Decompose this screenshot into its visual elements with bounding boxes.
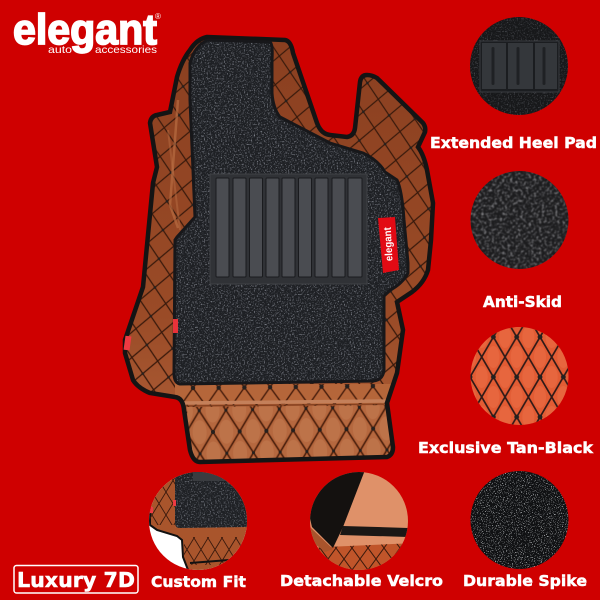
- mat tan leather base: [120, 30, 440, 470]
- mat black piping: [125, 37, 433, 462]
- carpet binding: [174, 40, 408, 384]
- feature: durable spike: [463, 465, 587, 590]
- logo wordmark: elegant: [13, 6, 157, 54]
- feature: anti-skid: [470, 171, 568, 308]
- small tag on mat side: [124, 336, 131, 350]
- feature: exclusive tan-black: [418, 322, 594, 457]
- heel pad detail circle: [470, 17, 568, 115]
- feature: detachable velcro: [280, 467, 443, 590]
- heel pad label: Extended Heel Pad: [430, 134, 597, 152]
- quilted leather detail circle: [470, 327, 568, 425]
- spike detail circle: [470, 471, 568, 569]
- tan seam along carpet edge: [272, 93, 399, 183]
- custom fit detail circle: [149, 472, 247, 570]
- velcro detail circle: [310, 472, 408, 570]
- small tag on carpet edge: [173, 319, 178, 333]
- red brand tag on carpet: [378, 217, 399, 273]
- feature: custom fit: [149, 472, 247, 588]
- feature: extended heel pad: [430, 12, 597, 152]
- registered mark: ®: [155, 12, 161, 21]
- badge outline: [14, 566, 138, 593]
- velcro label: Detachable Velcro: [280, 572, 443, 590]
- floor mat: [120, 30, 440, 470]
- red brand tag on carpet: elegant: [382, 226, 395, 261]
- durable spike label: Durable Spike: [463, 572, 587, 590]
- logo tagline right: accessories: [95, 44, 157, 56]
- custom fit label: Custom Fit: [151, 573, 247, 591]
- tan-black label: Exclusive Tan-Black: [418, 439, 594, 457]
- anti-skid label: Anti-Skid: [483, 293, 562, 311]
- brand logo: [13, 6, 161, 56]
- badge text: Luxury 7D: [17, 568, 135, 592]
- logo tagline left: auto: [48, 44, 72, 56]
- anti-skid detail circle: [470, 171, 568, 269]
- heel pad: [210, 174, 367, 284]
- luxury 7D badge: [14, 566, 138, 593]
- carpet: [170, 35, 415, 387]
